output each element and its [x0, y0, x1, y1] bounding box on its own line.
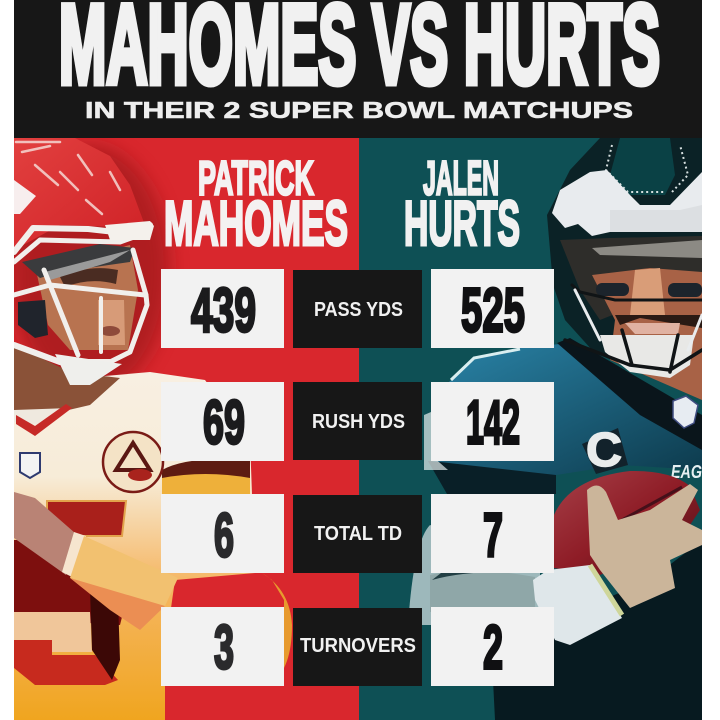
face	[36, 245, 138, 350]
hand	[587, 484, 702, 608]
player name: Jalen Hurts	[404, 152, 520, 259]
helmet wings	[552, 170, 702, 236]
eagles jersey	[431, 344, 702, 475]
Hurts turnovers box	[431, 607, 554, 686]
facemask	[14, 225, 150, 362]
helmet dots	[606, 145, 688, 192]
player name: Patrick Mahomes: MAHOMES	[164, 189, 348, 259]
Mahomes turnovers value: 3	[214, 614, 234, 682]
row: total touchdowns	[161, 494, 554, 573]
jersey	[14, 372, 255, 720]
player name: Jalen Hurts: HURTS	[404, 189, 520, 259]
helmet speckle	[16, 142, 120, 214]
AFC patch	[103, 432, 163, 492]
jersey number	[14, 501, 126, 685]
arm crescent	[262, 573, 292, 668]
collar stripe	[557, 338, 702, 450]
eye black	[596, 283, 629, 296]
collar	[16, 404, 72, 436]
Mahomes total TD box	[161, 494, 284, 573]
Mahomes turnovers box	[161, 607, 284, 686]
visor	[22, 244, 135, 278]
Mahomes rush yards box	[161, 382, 284, 461]
wristband	[590, 565, 622, 615]
jersey wordmark: EAG	[671, 462, 702, 482]
Hurts rush yards box	[431, 382, 554, 461]
Hurts turnovers value: 2	[483, 614, 503, 682]
turnovers label: TURNOVERS	[300, 635, 416, 657]
sleeve patch	[424, 412, 448, 470]
row: turnovers	[161, 607, 554, 686]
helmet shell	[14, 138, 146, 250]
row: rush yards	[161, 382, 554, 461]
visor	[560, 236, 702, 320]
player name: Jalen Hurts: JALEN	[423, 152, 499, 206]
turnovers label box	[293, 608, 422, 686]
face	[592, 268, 702, 400]
total TD label: TOTAL TD	[314, 523, 402, 545]
panel: teal Hurts side	[359, 138, 702, 720]
ear hole	[18, 300, 48, 338]
jersey stitching	[451, 349, 520, 380]
helmet logo	[14, 180, 36, 214]
Hurts total TD value: 7	[483, 502, 503, 570]
illustration: Patrick Mahomes	[10, 138, 702, 720]
Hurts total TD box	[431, 494, 554, 573]
captain patch	[582, 428, 628, 474]
rush yards label box	[293, 382, 422, 460]
shadow behind player	[10, 145, 170, 395]
black body	[493, 540, 702, 720]
teal arm of Hurts	[409, 525, 540, 625]
NFL shield	[20, 453, 40, 478]
Mahomes pass yards box	[161, 269, 284, 348]
chin guard	[600, 335, 694, 378]
chin guard	[55, 354, 122, 385]
NFL shield	[673, 396, 698, 428]
captain patch: C	[586, 424, 622, 477]
row: pass yards	[161, 269, 554, 348]
neck and shoulder	[14, 348, 120, 410]
sleeve shadow	[162, 461, 250, 478]
Mahomes pass yards value: 439	[191, 276, 256, 346]
total TD label box	[293, 495, 422, 573]
player name: Patrick Mahomes: PATRICK	[198, 152, 314, 206]
pass yards label box	[293, 270, 422, 348]
Mahomes rush yards value: 69	[203, 388, 245, 458]
subtitle: IN THEIR 2 SUPER BOWL MATCHUPS	[85, 97, 633, 123]
helmet shell	[547, 138, 702, 355]
Hurts rush yards value: 142	[466, 388, 520, 458]
arm and hand	[14, 492, 75, 575]
panel: red Mahomes side	[14, 138, 359, 720]
Mahomes total TD value: 6	[214, 502, 234, 570]
player name: Patrick Mahomes	[164, 152, 348, 259]
Hurts pass yards box	[431, 269, 554, 348]
brow bumper	[105, 221, 154, 240]
Hurts pass yards value: 525	[461, 276, 525, 346]
wrist wrap	[533, 565, 622, 645]
football	[554, 471, 700, 575]
rush yards label: RUSH YDS	[312, 411, 405, 433]
pass yards label: PASS YDS	[314, 299, 403, 321]
header band	[14, 0, 702, 138]
facemask	[565, 285, 702, 372]
